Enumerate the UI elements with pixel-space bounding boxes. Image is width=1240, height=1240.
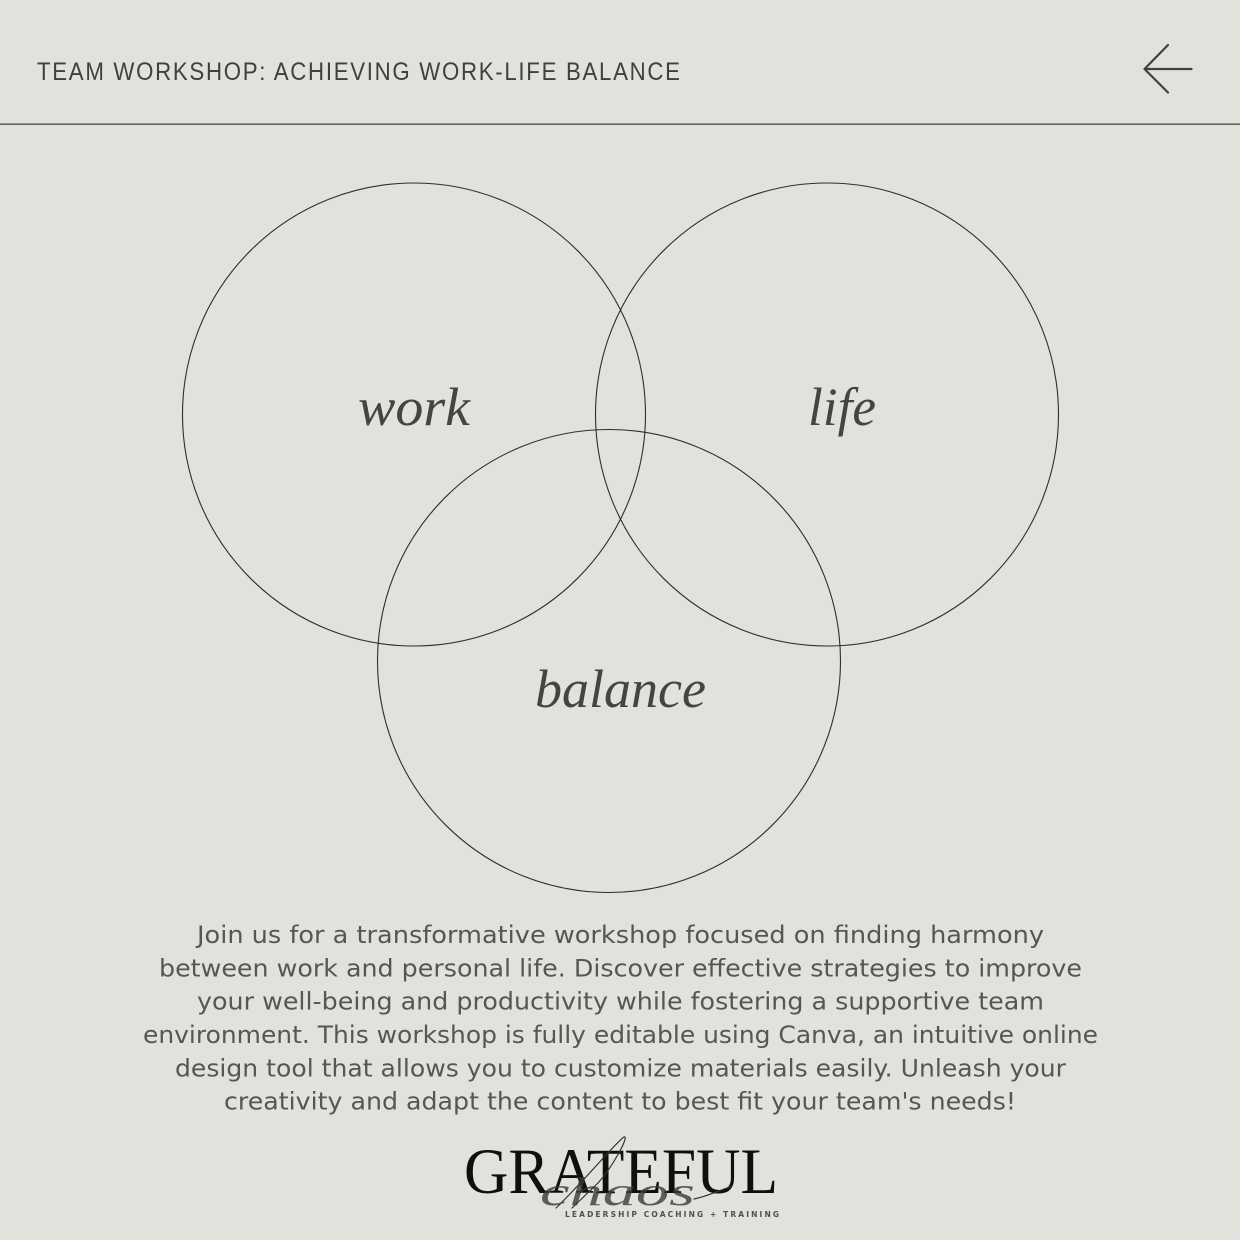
circle: life [596,183,1058,646]
description text block: creativity and adapt the content to best fit your team's needs! [224,1088,1016,1116]
circle: balance [378,430,840,892]
label: balance: balance [535,659,706,719]
description text block: design tool that allows you to customize materials easily. Unleash your [175,1054,1066,1082]
title: TEAM WORKSHOP: ACHIEVING WORK-LIFE BALANCE [37,59,680,86]
logo script word: chaos [540,1169,695,1214]
logo flourish [556,1137,732,1208]
description text block: between work and personal life. Discover effective strategies to improve [159,954,1082,982]
logo wordmark: GRATEFUL [464,1136,778,1208]
description text block: environment. This workshop is fully editable using Canva, an intuitive online [143,1021,1098,1049]
header [0,45,1240,125]
icon: back arrow [1144,45,1192,92]
description text block: your well-being and productivity while fostering a supportive team [197,988,1044,1016]
venn diagram [182,183,1058,892]
circle: work [182,183,646,646]
logo: Grateful Chaos [464,1136,779,1219]
label: life: life [808,377,876,437]
description text block [143,921,1098,1116]
label: work: work [358,377,471,437]
logo tagline: LEADERSHIP COACHING + TRAINING [565,1210,779,1219]
description text block: Join us for a transformative workshop focused on finding harmony [195,921,1044,949]
